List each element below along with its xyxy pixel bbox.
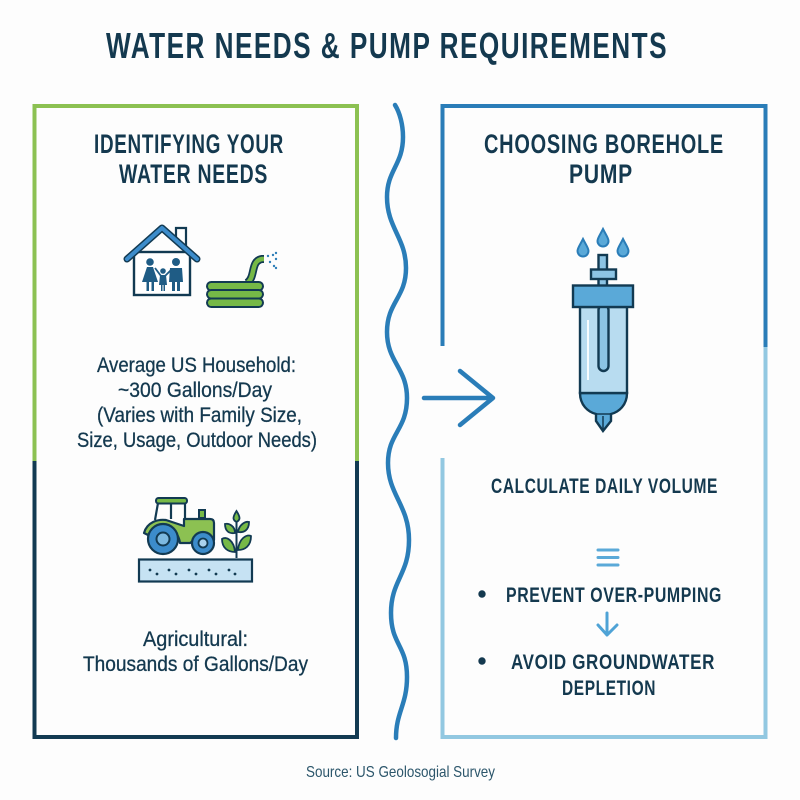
bullet: avoid groundwater depletion: DEPLETION <box>562 677 656 700</box>
heading: identifying your water needs: IDENTIFYING YOUR <box>94 129 284 159</box>
text: agricultural water use: Thousands of Gallons/Day <box>83 653 308 676</box>
arrow: left to right <box>424 371 493 425</box>
panel: choosing borehole pump <box>442 106 766 737</box>
source note: Source: US Geolosogial Survey <box>306 764 495 781</box>
panel: identifying your water needs <box>34 106 357 737</box>
icon: down arrow <box>598 613 617 635</box>
text: household water use: Size, Usage, Outdoor Needs) <box>77 429 317 452</box>
text: calculate daily volume: CALCULATE DAILY VOLUME <box>491 475 718 498</box>
bullet: avoid groundwater depletion <box>478 651 715 700</box>
bullet: prevent over-pumping <box>478 584 722 607</box>
text: agricultural water use: Agricultural: <box>143 628 248 651</box>
icon: equals lines <box>598 550 618 565</box>
text: household water use: ~300 Gallons/Day <box>118 379 272 402</box>
bullet: avoid groundwater depletion: AVOID GROUNDWATER <box>511 651 715 674</box>
divider: wavy line <box>387 105 409 738</box>
text: household water use: Average US Household: <box>97 354 296 377</box>
heading: choosing borehole pump: PUMP <box>569 159 633 189</box>
text: household water use: (Varies with Family Size, <box>97 404 302 427</box>
text: household water use <box>77 354 317 452</box>
icon: house with family <box>127 228 197 295</box>
text: agricultural water use <box>83 628 308 676</box>
heading: choosing borehole pump: CHOOSING BOREHOLE <box>484 129 724 159</box>
icon: borehole pump with water drops <box>573 229 633 431</box>
heading: identifying your water needs: WATER NEEDS <box>119 159 268 189</box>
icon: garden hose <box>207 252 277 307</box>
heading: choosing borehole pump <box>484 129 724 189</box>
bullet: prevent over-pumping: PREVENT OVER-PUMPING <box>506 584 722 607</box>
icon: tractor and plant <box>139 498 252 582</box>
heading: identifying your water needs <box>94 129 284 189</box>
